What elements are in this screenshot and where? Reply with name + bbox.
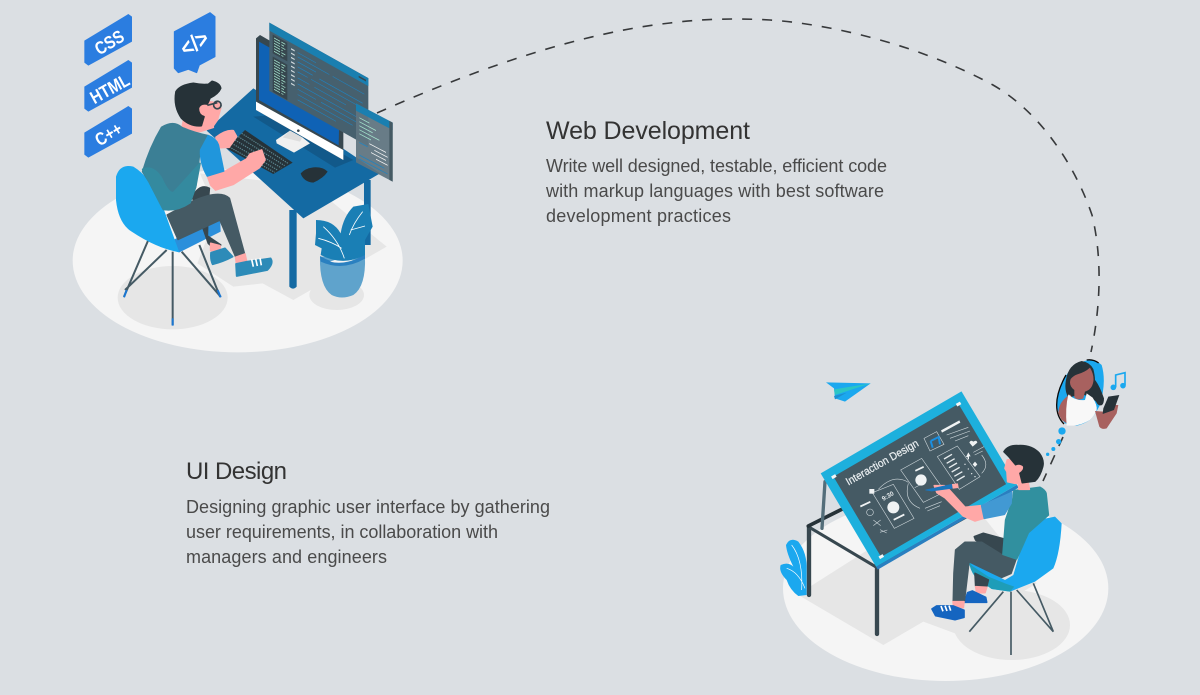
text block: Web Development description: development practices	[546, 206, 731, 226]
plant	[315, 204, 373, 297]
text block: UI Design description: user requirements, in collaboration with	[186, 522, 498, 542]
text block: Web Development description: with markup languages with best software	[545, 181, 884, 201]
ground ellipse	[73, 169, 403, 352]
ground ellipse	[783, 496, 1108, 681]
heading: Web Development: Web Development	[546, 117, 750, 145]
code window small	[356, 103, 393, 182]
mouse	[301, 167, 328, 183]
heading: UI Design: UI Design	[186, 458, 287, 485]
text block: UI Design description	[186, 497, 550, 567]
icon: code speech bubble: </>	[175, 25, 213, 62]
dashed connector path	[377, 19, 1099, 481]
drafting board	[821, 391, 1019, 570]
icon: code speech bubble	[174, 13, 215, 73]
code window large	[269, 23, 368, 146]
board wireframes: 9:30	[881, 490, 896, 503]
tag: CSS: CSS	[91, 26, 128, 59]
chair	[116, 166, 221, 326]
table frame	[808, 482, 967, 634]
text block: UI Design description: Designing graphic user interface by gathering	[186, 497, 550, 517]
paper plane	[826, 382, 871, 402]
keyboard	[227, 130, 293, 174]
leaf plant	[780, 540, 807, 596]
chair	[969, 517, 1062, 655]
board wireframes	[844, 420, 986, 533]
tag: HTML	[84, 60, 133, 112]
thought dots	[1046, 427, 1066, 456]
developer figure	[143, 81, 272, 276]
illustration: UI designer at drafting table	[780, 360, 1125, 681]
floor shadows	[118, 173, 387, 329]
tag: CSS	[84, 14, 132, 66]
icon: music note	[1111, 373, 1125, 389]
floor shadows	[800, 517, 1070, 660]
illustration: developer at desk	[73, 13, 403, 352]
designer figure	[926, 446, 1048, 620]
text block: Web Development description: Write well designed, testable, efficient code	[546, 156, 887, 176]
thought bubble: woman with phone	[1057, 360, 1119, 429]
desk	[207, 88, 380, 289]
monitor	[256, 35, 343, 160]
text block: UI Design description: managers and engineers	[186, 547, 387, 567]
tag: C++: C++	[91, 119, 126, 150]
tag: C++	[84, 106, 132, 158]
tag: HTML: HTML	[87, 70, 133, 108]
board wireframes: Interaction Design	[844, 438, 921, 488]
text block: Web Development description	[545, 156, 887, 226]
